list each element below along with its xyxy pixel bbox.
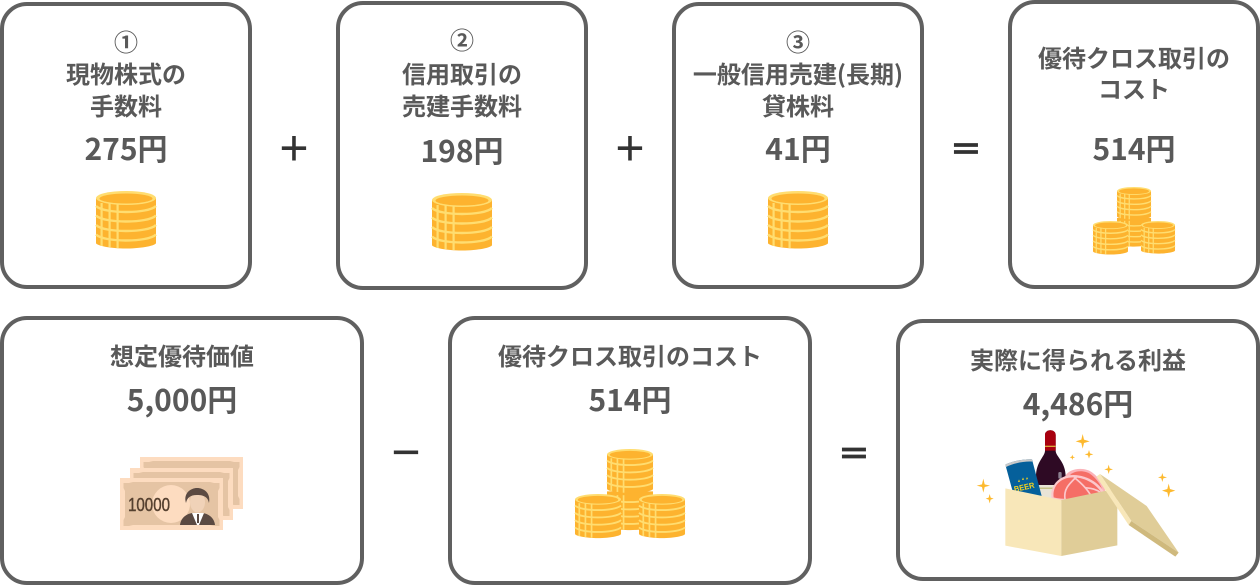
operator: plus: + [279,120,309,176]
heading: expected benefit value: 想定優待価値 [110,337,254,372]
amount: 275 yen: 275円 [84,125,168,169]
operator: minus: − [391,424,421,480]
icon: coin stack [432,193,492,250]
operator: plus: + [615,120,645,176]
number marker ①: ① [114,23,138,58]
amount: 514 yen: 514円 [588,376,672,420]
number marker ②: ② [450,21,474,56]
icon: banknotes: 10000 [128,495,170,515]
icon: three coin stacks [575,449,685,538]
operator: equals: = [953,133,979,163]
panel: cross trade cost [1010,2,1258,287]
icon: coin stack [96,191,156,248]
panel: ③ lending fee [674,4,922,287]
number marker ③: ③ [786,23,810,58]
amount: 4,486 yen: 4,486円 [1023,380,1133,424]
heading: spot stock commission: 現物株式の [66,55,186,90]
amount: 514 yen: 514円 [1092,125,1176,169]
amount: 5,000 yen: 5,000円 [127,376,237,420]
amount: 198 yen: 198円 [420,127,504,171]
icon: gift box with beer, wine and meat [977,430,1179,557]
icon: coin stack [768,191,828,248]
panel: expected benefit value [2,318,362,583]
heading: margin short sale commission: 信用取引の [402,55,522,90]
heading: cross trade cost: 優待クロス取引のコスト [498,337,762,372]
heading: spot stock commission: 手数料 [90,87,162,122]
heading: cross trade cost: コスト [1098,70,1170,105]
heading: actual profit: 実際に得られる利益 [970,341,1186,376]
operator: equals: = [841,437,867,468]
heading: general margin short lending fee: 一般信用売建(長期) [693,55,903,90]
panel: ② margin short sale commission [338,3,586,288]
heading: general margin short lending fee: 貸株料 [762,87,834,122]
panel: actual profit [898,321,1258,579]
icon: three coin stacks [1093,187,1175,255]
heading: margin short sale commission: 売建手数料 [402,87,522,122]
icon: gift box with beer, wine and meat: BEER [1013,481,1036,494]
amount: 41 yen: 41円 [765,125,831,169]
icon: banknotes [120,457,243,530]
panel: cross trade cost (second row) [450,318,810,583]
heading: cross trade cost: 優待クロス取引の [1038,39,1230,74]
panel: ① spot stock commission [2,4,250,287]
